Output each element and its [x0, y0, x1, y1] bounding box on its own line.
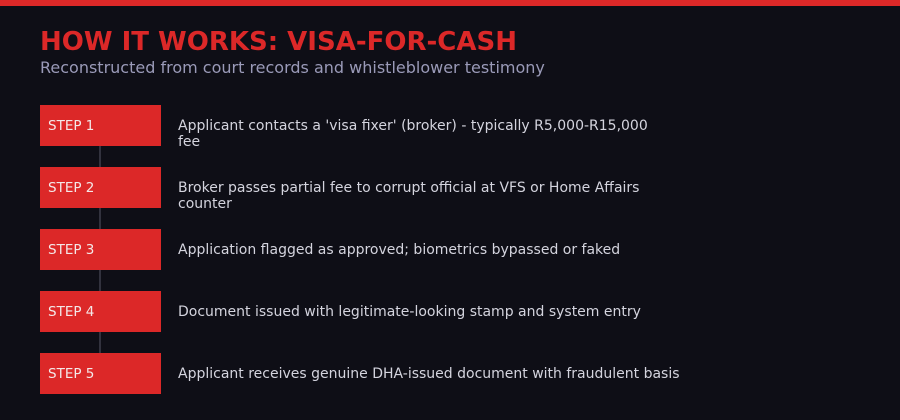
step 4 [40, 291, 641, 332]
step 5: Applicant receives genuine DHA-issued document with fraudulent basis [178, 366, 680, 382]
step 4: Document issued with legitimate-looking stamp and system entry [178, 304, 641, 320]
step 4: STEP 4 [48, 304, 94, 320]
step 1 [40, 105, 648, 150]
step 3: STEP 3 [48, 242, 94, 258]
step 1: fee [178, 134, 200, 150]
subtitle: Reconstructed from court records and whistleblower testimony [40, 58, 545, 77]
step 2: STEP 2 [48, 180, 94, 196]
step 2 [40, 167, 639, 212]
step 2: Broker passes partial fee to corrupt official at VFS or Home Affairs [178, 180, 639, 196]
title: HOW IT WORKS: VISA-FOR-CASH [40, 27, 517, 57]
step 1: STEP 1 [48, 118, 94, 134]
step 3: Application flagged as approved; biometrics bypassed or faked [178, 242, 620, 258]
step 2: counter [178, 196, 232, 212]
step 5 [40, 353, 680, 394]
step 5: STEP 5 [48, 366, 94, 382]
step 1: Applicant contacts a 'visa fixer' (broker) - typically R5,000-R15,000 [178, 118, 648, 134]
step 3 [40, 229, 620, 270]
